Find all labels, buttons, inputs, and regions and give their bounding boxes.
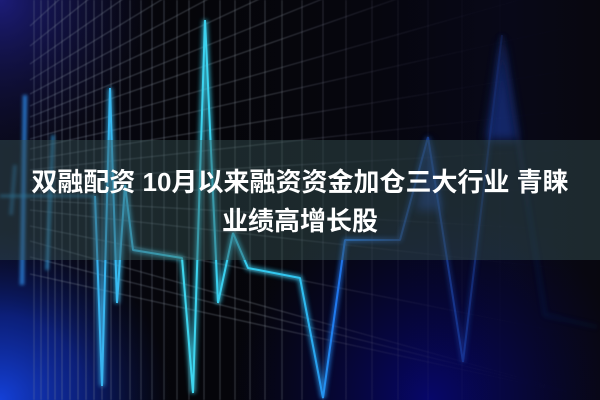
heart-rate line glow (95, 20, 597, 398)
title band (0, 140, 600, 260)
title line 1: 双融配资 10月以来融资资金加仓三大行业 青睐 (31, 167, 569, 197)
right faded blue spike glows (416, 38, 518, 210)
heart-rate line (95, 20, 502, 398)
title line 2: 业绩高增长股 (222, 206, 378, 236)
left faded glow spikes (0, 95, 96, 285)
